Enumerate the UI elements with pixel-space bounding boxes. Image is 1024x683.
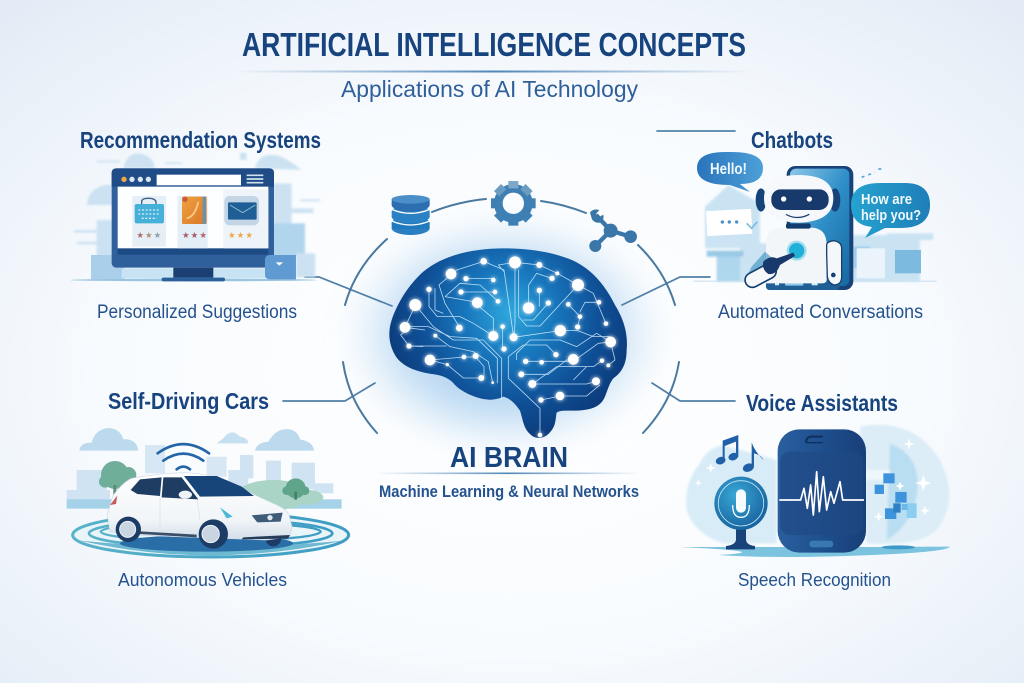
illustration: monitor: ★ (245, 230, 253, 240)
heading: voice assistants: Voice Assistants (746, 390, 898, 416)
illustration: robot and phone (693, 166, 937, 290)
panel: voice assistants (680, 390, 950, 590)
icon: database (392, 195, 430, 235)
illustration: monitor (70, 153, 320, 281)
illustration: car (67, 428, 349, 557)
illustration: monitor: ★ (191, 230, 199, 240)
illustration: smart speaker (680, 425, 950, 557)
brain illustration (389, 248, 627, 438)
caption: autonomous vehicles: Autonomous Vehicles (118, 570, 287, 590)
heading: recommendation systems: Recommendation Systems (80, 127, 321, 153)
caption: speech recognition: Speech Recognition (738, 570, 891, 590)
brain label: Machine Learning & Neural Networks (379, 482, 639, 501)
title: ARTIFICIAL INTELLIGENCE CONCEPTS (242, 26, 746, 63)
illustration: monitor: ★ (199, 230, 207, 240)
illustration: monitor: ★ (182, 230, 190, 240)
circuit traces (401, 261, 615, 437)
brain label: AI BRAIN (450, 442, 568, 474)
glowing nodes (400, 256, 616, 437)
brain silhouette (389, 248, 627, 438)
heading: self-driving cars: Self-Driving Cars (108, 388, 269, 414)
speech bubble: hello (697, 152, 763, 192)
central halo (340, 213, 670, 457)
panel: recommendation systems (70, 127, 321, 323)
speech bubble: how are: How are (861, 192, 912, 208)
panel: chatbots (693, 127, 937, 323)
panel: self-driving cars (67, 388, 349, 590)
subtitle: Applications of AI Technology (341, 76, 638, 102)
brain label (376, 442, 640, 501)
speech bubble: how are (851, 183, 930, 238)
illustration: monitor: ★ (237, 230, 245, 240)
connector lines and orbit arcs (107, 131, 910, 433)
caption: automated conversations: Automated Conversations (718, 302, 923, 323)
illustration: monitor: ★ (154, 230, 162, 240)
icon: molecule wrench (589, 210, 637, 252)
speech bubble: how are: help you? (861, 208, 921, 224)
heading: chatbots: Chatbots (751, 127, 833, 153)
caption: personalized suggestions: Personalized Suggestions (97, 302, 297, 323)
speech bubble: hello: Hello! (710, 161, 747, 178)
icon: gear (491, 181, 536, 226)
illustration: monitor: ★ (228, 230, 236, 240)
illustration: monitor: ★ (136, 230, 144, 240)
illustration: monitor: ★ (145, 230, 153, 240)
